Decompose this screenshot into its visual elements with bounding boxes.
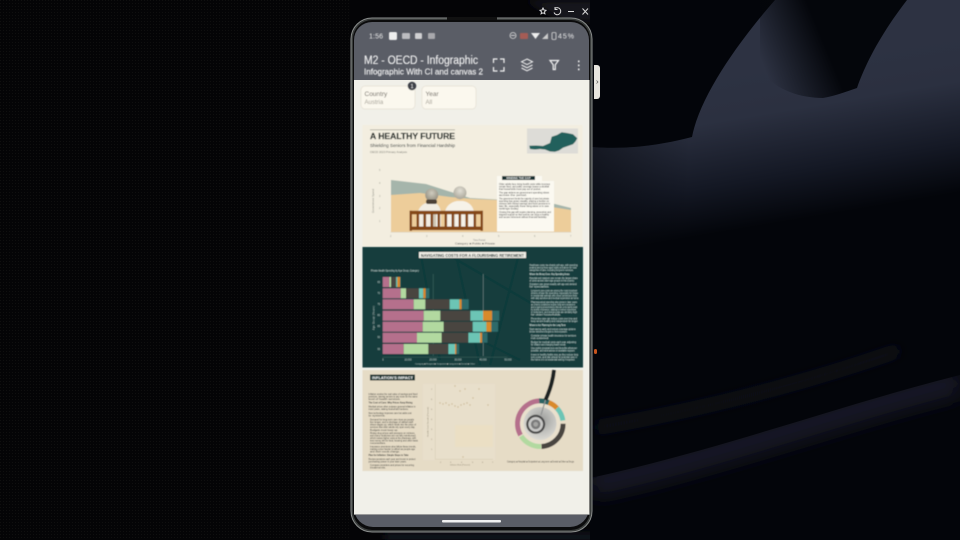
area chart: 4 bbox=[462, 235, 464, 238]
filters bbox=[361, 82, 476, 109]
photo: seniors on bench bbox=[410, 186, 483, 231]
filter: country: Country bbox=[364, 91, 388, 98]
scatter plot: 3 bbox=[450, 462, 452, 464]
scatter plot: 2 bbox=[440, 462, 442, 464]
text column: as chronic conditions require long-term treatment bbox=[531, 304, 575, 306]
icon: layers bbox=[522, 59, 532, 71]
segment: green bbox=[521, 436, 541, 447]
window controls bbox=[540, 7, 588, 15]
scatter plot: 4 bbox=[431, 419, 433, 421]
stacked bar chart: 90 bbox=[377, 337, 381, 339]
filter: year: All bbox=[426, 100, 432, 106]
area chart: Time Period bbox=[473, 239, 486, 242]
panel: a healthy future bbox=[362, 125, 582, 247]
text column: Rising drug prices add pressure on retirees, bbox=[370, 432, 415, 435]
legend: Category ■ Public ■ Private bbox=[455, 242, 496, 246]
text column: drives wages up, which feeds into the price of bbox=[370, 424, 416, 426]
scatter plot: 5 bbox=[472, 462, 474, 464]
text column: Budget for medical costs each year, adjusting bbox=[531, 341, 577, 344]
area chart: Government Spend bbox=[372, 188, 375, 213]
stacked bar chart: 40,000 bbox=[479, 360, 487, 362]
text column: and ongoing prescriptions that are only partly paid bbox=[531, 306, 578, 309]
text column bbox=[530, 264, 579, 362]
heading bbox=[419, 252, 526, 258]
text column: possible, and seek advice on available support. bbox=[531, 350, 575, 352]
scatter plot: 5 bbox=[431, 409, 433, 411]
callout: minding the gap: across the period. bbox=[499, 194, 528, 197]
text column: for older households. bbox=[531, 314, 561, 316]
stethoscope tube bbox=[546, 370, 554, 400]
stethoscope disc bbox=[524, 407, 556, 440]
app header bbox=[364, 55, 580, 76]
icon: filter bbox=[550, 60, 558, 70]
text column: less money left for food, housing and other basic bbox=[370, 440, 419, 442]
text column: for specialists. bbox=[530, 286, 550, 288]
text column: for inflation and changing health needs. bbox=[531, 344, 566, 346]
stacked bar chart: 50,000 bbox=[504, 360, 512, 362]
text column: Review pensions each year and invest to protect bbox=[368, 458, 416, 461]
callout: minding the gap: and secure retirement without financial hardship. bbox=[499, 216, 547, 219]
phone body bbox=[351, 18, 592, 532]
icon: pin bbox=[540, 8, 546, 14]
text column: in retirement, and dental costs are similarly high bbox=[531, 311, 578, 314]
text column: Use public programmes and benefits wherever bbox=[531, 347, 577, 350]
text column: peaking among those aged eighty and above for most bbox=[530, 266, 577, 270]
text column: live longer, and a shortage of skilled staff bbox=[370, 421, 413, 424]
scatter plot: Inflation Rate (Percent) bbox=[450, 464, 470, 466]
scatter plot: 6 bbox=[431, 399, 433, 401]
callout: minding the gap: later life, especially those living alone or in care bbox=[499, 205, 550, 208]
text column: Inflation erodes the real value of savings and fixed bbox=[368, 393, 418, 396]
text column: and their needs change. bbox=[370, 450, 400, 454]
segment: dark brown bbox=[542, 424, 563, 446]
area chart: 7 bbox=[570, 235, 572, 238]
callout: minding the gap: Closing this gap will require planning, prevention and bbox=[499, 211, 552, 214]
row 4 bbox=[383, 311, 499, 321]
stethoscope head bbox=[526, 415, 545, 434]
heading bbox=[370, 374, 415, 380]
text column: necessities. bbox=[370, 442, 386, 445]
icon: fullscreen bbox=[494, 59, 504, 71]
callout: minding the gap: The gap widens as government spending slows bbox=[499, 192, 550, 194]
area chart: 3 bbox=[426, 235, 428, 238]
text column: term costs, and plan ahead for potential care in bbox=[531, 356, 578, 359]
callout: minding the gap: MINDING THE GAP bbox=[506, 176, 531, 180]
text column: most years, raising household burdens. bbox=[368, 408, 409, 411]
stacked bar chart: 30,000 bbox=[454, 360, 462, 362]
area chart bbox=[372, 169, 572, 246]
text column: keep seniors healthy and independent for longer. bbox=[531, 320, 578, 323]
scatter plot: 3 bbox=[431, 429, 433, 431]
scatter plot: Health Cost Growth (Percent) bbox=[426, 407, 430, 437]
text column: level of health services. bbox=[368, 398, 401, 401]
stacked bar chart: 80 bbox=[377, 315, 381, 317]
filter: year: Year bbox=[426, 91, 439, 98]
stacked bar chart: 10,000 bbox=[404, 360, 412, 362]
text column: Insurance premiums also follow these trends, bbox=[370, 446, 416, 448]
scatter plot: 7 bbox=[431, 389, 433, 391]
title: M2 - OECD - Infographic bbox=[364, 55, 478, 67]
bench bbox=[410, 211, 483, 231]
stacked bar chart: 65 bbox=[377, 282, 381, 284]
area chart: 5 bbox=[379, 169, 381, 172]
chart title: Private Health Spending by Age Group, Category bbox=[371, 268, 419, 272]
status bar: 45% bbox=[558, 34, 574, 40]
legend: Category ■ Hospital ■ Outpatient ■ Long-term ■ Dental ■ Other ■ Drugs bbox=[507, 460, 575, 464]
text column: which means higher costs at the pharmacy, with bbox=[370, 437, 417, 440]
area chart: 6 bbox=[534, 235, 536, 238]
scatter plot: 7 bbox=[492, 462, 494, 464]
legend: Category ■ Hospital ■ Outpatient ■ Long-term ■ Dental ■ Other bbox=[415, 362, 475, 366]
scatter plot: 1 bbox=[431, 449, 433, 451]
area chart: 2 bbox=[390, 235, 392, 238]
text column: Invest in healthy habits now, as they reduce long bbox=[531, 354, 579, 356]
text column: by public insurance, adding to retiree expenses bbox=[531, 308, 577, 312]
segment: orange bbox=[549, 403, 557, 408]
text column: Where the Money Goes: Key Spending Areas bbox=[530, 273, 570, 276]
scatter plot: 2 bbox=[431, 439, 433, 441]
panel: navigating costs bbox=[362, 247, 583, 368]
status bar: 1:56 bbox=[369, 34, 383, 40]
row 3 bbox=[383, 299, 469, 309]
row 7 bbox=[383, 344, 459, 354]
text column: purchasing power in your later years. bbox=[368, 460, 407, 464]
phone bbox=[351, 17, 600, 532]
text column: Start saving early and review coverage options bbox=[530, 328, 576, 331]
text column: with daily activities and medical supervision at home. bbox=[531, 297, 579, 300]
heading: A HEALTHY FUTURE bbox=[370, 131, 455, 141]
side button bbox=[594, 65, 600, 99]
source note: OECD 2023 Primary Analysis bbox=[370, 151, 408, 154]
scatter plot bbox=[423, 384, 495, 466]
callout: minding the gap: spending has grown steadily, placing a burden on bbox=[499, 200, 550, 203]
icon: minimize bbox=[568, 10, 574, 12]
icon: rotate bbox=[554, 7, 561, 15]
text column: before retirement begins to limit exposure. bbox=[530, 330, 568, 334]
panel: navigating costs: NAVIGATING COSTS FOR A FLOURISHING RETIREMENT bbox=[421, 253, 524, 258]
text column: drivers of later life spending, especially for those bbox=[531, 292, 579, 295]
text column: Budgets must keep up. bbox=[370, 429, 398, 432]
stacked bar chart: 95 bbox=[377, 349, 381, 351]
subheading: Shielding Seniors from Financial Hardship bbox=[370, 143, 455, 148]
text column: making cover harder to afford as people age bbox=[370, 448, 416, 451]
callout: minding the gap: retirees with limited savings and fixed pensions in bbox=[499, 202, 551, 206]
donut chart with stethoscope bbox=[507, 370, 575, 464]
callout: minding the gap bbox=[497, 176, 554, 232]
callout: minding the gap: remain fixed, and public coverage leaves a shortfall bbox=[499, 186, 549, 188]
row 1 bbox=[383, 277, 401, 287]
text column: treatments. bbox=[370, 466, 386, 470]
text column: Where to Act: Planning for the Long Term bbox=[530, 324, 566, 327]
text column: services that older adults rely upon every day. bbox=[370, 426, 415, 429]
map: Austria bbox=[527, 128, 578, 154]
text column: Pharmaceutical spending also grows in later years bbox=[531, 301, 578, 304]
callout: minding the gap: targeted support so that seniors can enjoy a healthy bbox=[499, 214, 550, 216]
text column: Healthcare costs rise sharply with age, with spending bbox=[530, 264, 578, 267]
segment: teal bbox=[557, 408, 563, 421]
text column: the home or in a residential setting if required. bbox=[531, 358, 575, 362]
text column: to systems. bbox=[368, 414, 386, 418]
row 5 bbox=[383, 322, 498, 332]
stacked bar chart bbox=[372, 274, 512, 366]
text column: Long-term care costs are among the most important bbox=[531, 290, 577, 292]
filter: country: Austria bbox=[364, 100, 384, 106]
area chart: 3 bbox=[379, 195, 381, 198]
area chart: 5 bbox=[498, 235, 500, 238]
filter: year bbox=[422, 86, 476, 109]
text column: Preventive care can reduce costs over time and bbox=[531, 318, 578, 320]
text column: The Cost of Care: Why Prices Keep Rising bbox=[368, 402, 413, 404]
stacked bar chart: Age Group (Years) bbox=[372, 306, 376, 330]
text column: Consider private health insurance for services bbox=[531, 334, 577, 338]
subtitle: Infographic With CI and canvas 2 bbox=[364, 66, 483, 76]
segment: pink bbox=[517, 401, 539, 435]
stacked bar chart: 20,000 bbox=[429, 360, 437, 362]
scatter plot: 6 bbox=[482, 462, 484, 464]
text column bbox=[368, 393, 419, 470]
filter: country: 1 bbox=[411, 84, 414, 90]
home indicator bbox=[442, 520, 501, 522]
filter: country bbox=[361, 82, 416, 109]
text column: not covered. bbox=[531, 337, 549, 340]
icon: more menu bbox=[578, 60, 580, 70]
segment: dark teal bbox=[539, 401, 549, 403]
panel: inflation's impact bbox=[362, 370, 583, 471]
text column: Demand for long-term care rises as people bbox=[370, 418, 415, 422]
text column: and many medicines are not fully reimbursed, bbox=[370, 434, 416, 438]
text column: New technology improves care but adds cost bbox=[368, 412, 412, 415]
icon: close bbox=[582, 8, 588, 14]
callout: minding the gap: settings today. bbox=[499, 208, 520, 210]
callout: minding the gap: that households must pay out of pocket. bbox=[499, 188, 541, 191]
area chart: 4 bbox=[379, 182, 381, 185]
text column: categories of care, including long-term services. bbox=[530, 269, 574, 272]
text column: Hospital and inpatient care remain the largest share bbox=[530, 277, 578, 280]
senior right bbox=[445, 201, 474, 227]
text column: Medical prices often outpace general inflation in bbox=[368, 406, 416, 408]
row 2 bbox=[383, 288, 429, 298]
text column: Plan for Inflation: Simple Steps to Take bbox=[368, 454, 409, 457]
text column: Compare providers and prices for recurring bbox=[370, 464, 415, 467]
stacked bar chart: 70 bbox=[377, 293, 381, 295]
text column: Outpatient care grows steadily with age and demand bbox=[530, 283, 577, 286]
text column: pensions, leaving seniors to pay more for the same bbox=[368, 396, 418, 398]
stacked bar chart: 85 bbox=[377, 326, 381, 328]
screen bbox=[354, 22, 589, 527]
callout: minding the gap: The government funds the majority of care but private bbox=[499, 198, 550, 200]
area chart: 2 bbox=[379, 207, 381, 210]
text column: of costs across older age groups in this country. bbox=[530, 280, 575, 282]
stacked bar chart: 0 bbox=[382, 360, 384, 362]
scatter plot: 4 bbox=[461, 462, 463, 464]
callout: minding the gap: Older adults face rising health costs while incomes bbox=[499, 183, 551, 186]
status bar bbox=[369, 32, 574, 40]
stacked bar chart: 75 bbox=[377, 304, 381, 306]
senior left bbox=[418, 203, 441, 227]
panel: inflation's impact: INFLATION'S IMPACT bbox=[372, 375, 414, 380]
row 6 bbox=[383, 333, 487, 343]
area chart: 1 bbox=[379, 220, 381, 223]
text column: in residential settings who need continuous help bbox=[531, 294, 578, 298]
